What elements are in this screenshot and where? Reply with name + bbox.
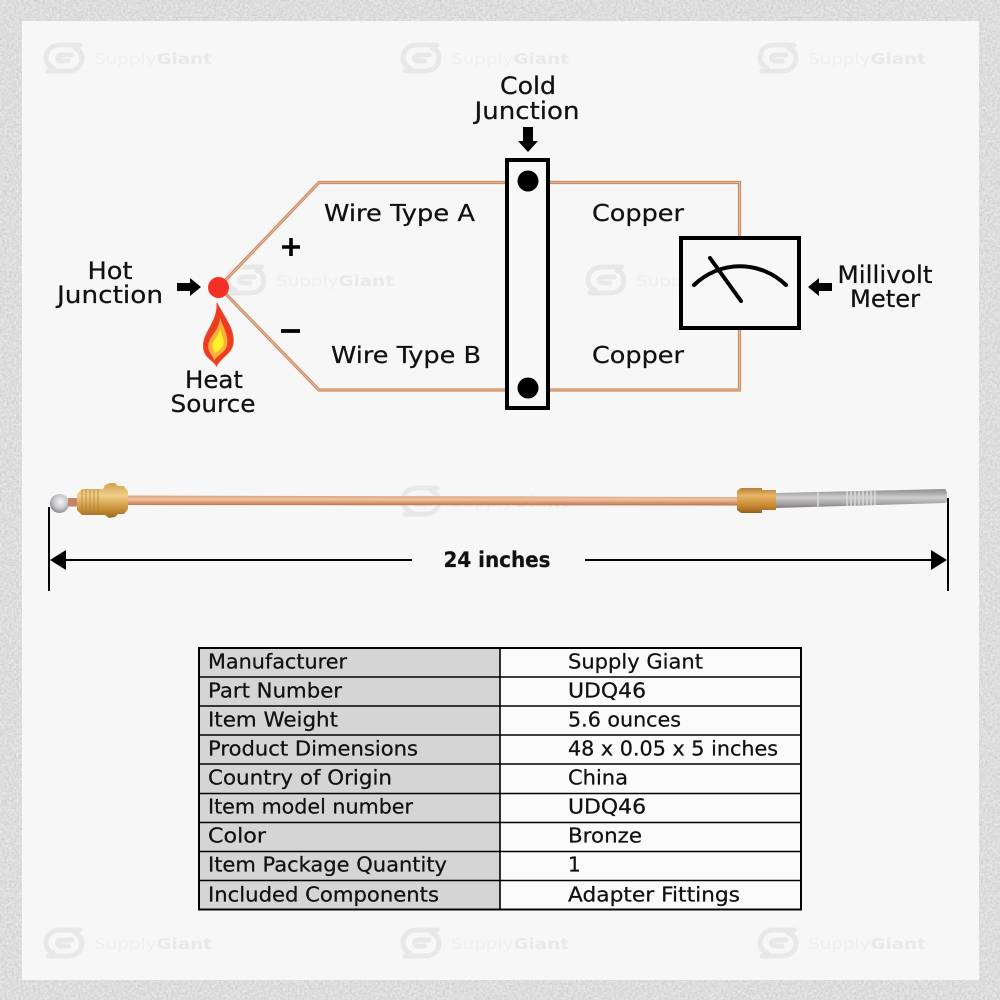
row: manufacturer: Supply Giant — [568, 650, 703, 674]
arrow: millivolt meter — [808, 278, 832, 296]
row: part number: UDQ46 — [568, 678, 646, 702]
row: country of origin — [208, 766, 628, 790]
row: included components: Adapter Fittings — [568, 882, 740, 906]
label: heat source — [170, 366, 256, 418]
brass nut — [77, 483, 128, 518]
label: copper top: Copper — [592, 199, 684, 227]
steel probe — [776, 489, 947, 508]
label: hot junction: Hot — [88, 257, 132, 285]
row: color: Color — [208, 824, 267, 848]
row: product dimensions: 48 x 0.05 x 5 inches — [568, 736, 778, 760]
row: item package quantity: Item Package Quantity — [208, 852, 447, 876]
label: millivolt meter: Meter — [850, 285, 920, 313]
label: hot junction — [55, 257, 163, 309]
label: millivolt meter — [838, 261, 932, 313]
icon: flame — [203, 303, 233, 366]
row: item model number — [208, 794, 646, 818]
label: 24 inches: 24 inches — [444, 548, 550, 573]
millivolt meter — [681, 238, 799, 328]
row: country of origin: China — [568, 766, 628, 790]
label: wire type B: Wire Type B — [331, 341, 481, 369]
specification table — [199, 648, 801, 910]
row: item model number: Item model number — [208, 794, 414, 818]
dimension line — [49, 498, 948, 591]
plus sign — [282, 238, 300, 256]
row: part number: Part Number — [208, 678, 343, 702]
label: cold junction: Cold — [500, 72, 556, 100]
row: product dimensions — [208, 736, 778, 760]
arrow: hot junction — [177, 278, 201, 296]
row: country of origin: Country of Origin — [208, 766, 392, 790]
label: wire type A: Wire Type A — [324, 199, 475, 227]
cold junction block — [507, 160, 548, 408]
label: cold junction — [472, 72, 580, 125]
row: included components: Included Components — [208, 882, 439, 906]
label: millivolt meter: Millivolt — [838, 261, 932, 289]
row: item weight: 5.6 ounces — [568, 708, 681, 732]
minus sign — [281, 329, 300, 333]
row: manufacturer: Manufacturer — [208, 650, 348, 674]
row: item model number: UDQ46 — [568, 794, 646, 818]
row: part number — [208, 678, 646, 702]
row: manufacturer — [208, 650, 703, 674]
label: heat source: Heat — [185, 366, 243, 394]
row: included components — [208, 882, 740, 906]
hot junction dot — [208, 277, 229, 298]
arrow: cold junction — [518, 127, 538, 152]
label: hot junction: Junction — [55, 281, 163, 309]
row: item weight — [208, 708, 681, 732]
row: item package quantity: 1 — [568, 852, 581, 876]
copper tube — [125, 496, 740, 506]
thermocouple product photo — [50, 483, 947, 518]
silver ball tip — [50, 494, 69, 513]
circuit wires — [219, 182, 740, 390]
label: heat source: Source — [170, 390, 256, 418]
row: item weight: Item Weight — [208, 708, 338, 732]
brass collar — [737, 488, 776, 513]
label: copper bottom: Copper — [592, 341, 684, 369]
row: item package quantity — [208, 852, 581, 876]
label: cold junction: Junction — [472, 97, 580, 125]
row: color: Bronze — [568, 824, 642, 848]
row: product dimensions: Product Dimensions — [208, 736, 418, 760]
row: color — [208, 824, 642, 848]
